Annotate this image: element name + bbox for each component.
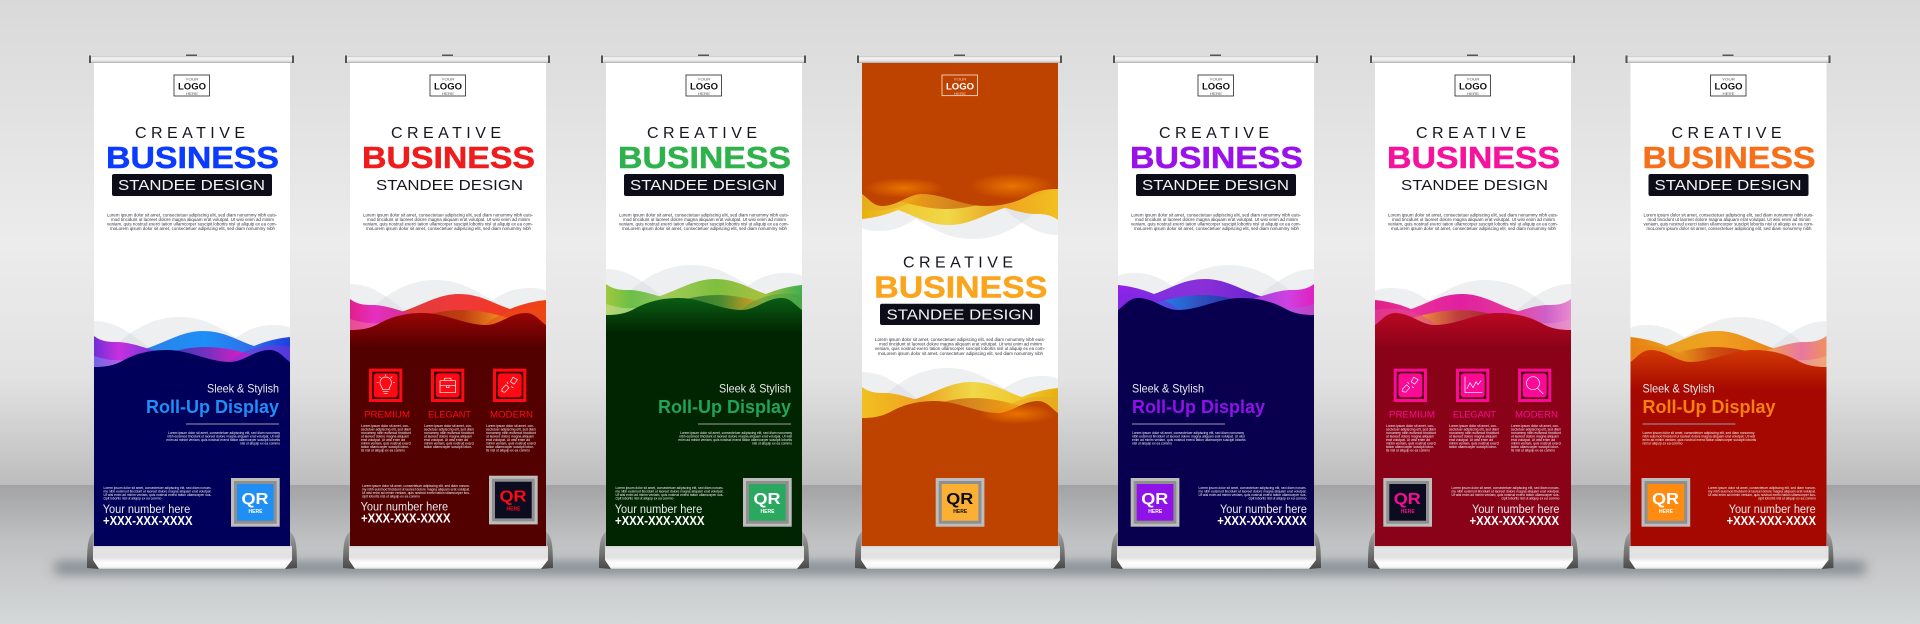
feature text: premium: Lorem ipsum dolor sit amet, con- (361, 424, 409, 428)
banner background (862, 60, 1058, 546)
feature labels (364, 410, 533, 421)
feature text: premium: tation ullamcorper suscipit lobor- (1386, 445, 1434, 449)
body text: mod tincidunt ut laoreet dolore magna aliquam erat volutpat. Ut wisi enim ad minim (879, 342, 1042, 346)
body text: moLorem ipsum dolor sit amet, consectetuer adipiscing elit, sed diam nonummy nibh (366, 226, 532, 231)
feature text: modern: minim veniam, quis nostrud exerci (486, 442, 536, 446)
feature text: elegant (424, 424, 474, 449)
logo: LOGO (1714, 82, 1742, 92)
logo: LOGO (690, 82, 718, 92)
contact text: Ut wisi enim ad minim veniam, quis nostrud exerci tation ullamcorper sus- (1708, 493, 1816, 497)
contact text: +XXX-XXX-XXXX (1217, 514, 1307, 528)
contact text: Ut wisi enim ad minim veniam, quis nostrud exerci tation ullamcorper sus- (1452, 493, 1560, 497)
body text: moLorem ipsum dolor sit amet, consectetuer adipiscing elit, sed diam nonummy nibh (878, 351, 1044, 356)
bottom wave graphic (862, 368, 1058, 546)
contact text (615, 486, 724, 528)
description: nisl ut aliquip ex ea commo (1642, 442, 1683, 446)
body text: moLorem ipsum dolor sit amet, consectetuer adipiscing elit, sed diam nonummy nibh (1391, 226, 1557, 231)
body text (363, 212, 534, 231)
top wave graphic (862, 60, 1058, 239)
feature text: elegant: erat volutpat. Ut wisi enim ad (424, 438, 468, 442)
title: business: BUSINESS (1642, 140, 1816, 175)
contact text: my nibh euismod tincidunt ut laoreet dolore magna aliquam erat volutpat. (1198, 490, 1307, 494)
divider (186, 424, 279, 425)
icon: briefcase (432, 370, 463, 400)
QR block (936, 478, 984, 527)
wave graphic (94, 317, 290, 546)
subtitle pill (1136, 174, 1296, 196)
logo: HERE (954, 92, 967, 96)
feature text: premium: minim veniam, quis nostrud exerci (1386, 442, 1436, 446)
contact text: Your number here (103, 504, 190, 516)
title: business: BUSINESS (1387, 140, 1560, 175)
body text: moLorem ipsum dolor sit amet, consectetuer adipiscing elit, sed diam nonummy nibh (110, 226, 276, 231)
contact text: cipit lobortis nisl ut aliquip ex ea commo (1502, 496, 1560, 500)
stand base (343, 532, 553, 569)
description: enim ad minim veniam, quis nostrud exerci tation ullamcorper suscipit lobortis (1642, 438, 1757, 442)
feature text: modern: minim veniam, quis nostrud exerci (1511, 442, 1561, 446)
feature text: premium: ut laoreet dolore magna aliquam (361, 434, 409, 438)
contact text: cipit lobortis nisl ut aliquip ex ea commo (616, 496, 674, 500)
logo: YOUR (1210, 78, 1223, 82)
body text: mod tincidunt ut laoreet dolore magna aliquam erat volutpat. Ut wisi enim ad minim (367, 217, 530, 222)
feature labels: PREMIUM (364, 410, 410, 421)
feature labels: ELEGANT (428, 410, 471, 421)
heading: roll-up display: Roll-Up Display (658, 396, 792, 417)
logo: YOUR (442, 78, 455, 82)
logo: HERE (186, 92, 199, 96)
feature text: premium: tis nisl ut aliquip ex ea commo (361, 448, 405, 452)
feature text: modern: tis nisl ut aliquip ex ea commo (486, 448, 530, 452)
description: Lorem ipsum dolor sit amet, consectetuer adipiscing elit, sed diam nonummy (1642, 431, 1755, 435)
divider (698, 424, 791, 425)
feature text: elegant: minim veniam, quis nostrud exerci (1449, 442, 1499, 446)
feature text: premium (1386, 424, 1436, 452)
icon: magnifier (1520, 370, 1550, 400)
divider (1642, 424, 1736, 425)
logo: HERE (1722, 92, 1735, 96)
banner background (94, 60, 290, 546)
feature text: modern: nonummy nibh euismod tincidunt (486, 431, 536, 435)
feature text: premium: erat volutpat. Ut wisi enim ad (1386, 438, 1430, 442)
contact text: my nibh euismod tincidunt ut laoreet dolore magna aliquam erat volutpat. (1452, 490, 1560, 494)
heading: roll-up display: Roll-Up Display (1132, 396, 1266, 417)
body text: Lorem ipsum dolor sit amet, consectetuer adipiscing elit, sed diam nonummy nibh euis- (875, 337, 1046, 342)
feature text: premium: ut laoreet dolore magna aliquam (1386, 434, 1434, 438)
contact text: Lorem ipsum dolor sit amet, consectetuer adipiscing elit, sed diam nonum- (362, 484, 470, 488)
QR block (743, 478, 792, 527)
feature text: modern (1511, 424, 1561, 452)
logo: LOGO (178, 82, 206, 92)
feature text: modern: ut laoreet dolore magna aliquam (486, 434, 534, 438)
feature labels: PREMIUM (1389, 410, 1435, 421)
subtitle pill (112, 174, 272, 196)
feature text: modern: tis nisl ut aliquip ex ea commo (1511, 448, 1555, 452)
contact text: Your number here (1472, 504, 1560, 516)
body text: mod tincidunt ut laoreet dolore magna aliquam erat volutpat. Ut wisi enim ad minim (1392, 217, 1555, 222)
QR block: HERE (1401, 509, 1415, 515)
description (1132, 431, 1246, 446)
contact text: my nibh euismod tincidunt ut laoreet dolore magna aliquam erat volutpat. (616, 490, 724, 494)
title: business: BUSINESS (618, 140, 791, 175)
background floor (0, 485, 1920, 624)
contact text: Lorem ipsum dolor sit amet, consectetuer adipiscing elit, sed diam nonum- (1198, 486, 1306, 490)
subtitle pill (1648, 174, 1808, 196)
orange glow: bottom (979, 404, 1055, 424)
body text: Lorem ipsum dolor sit amet, consectetuer adipiscing elit, sed diam nonummy nibh euis- (619, 212, 790, 218)
body text: mod tincidunt ut laoreet dolore magna aliquam erat volutpat. Ut wisi enim ad minim (1135, 217, 1298, 222)
body text (875, 337, 1046, 356)
feature text: premium: tis nisl ut aliquip ex ea commo (1386, 448, 1430, 452)
logo: LOGO (1459, 82, 1487, 92)
contact text: +XXX-XXX-XXXX (361, 512, 451, 526)
icon: light bulb (370, 370, 401, 400)
tagline: Sleek & Stylish (719, 382, 791, 396)
icon: broken chain (494, 370, 525, 400)
body text (619, 212, 790, 231)
contact text: +XXX-XXX-XXXX (1470, 514, 1560, 528)
description: nisl ut aliquip ex ea commo (752, 442, 792, 446)
logo (430, 75, 466, 96)
feature text: premium: erat volutpat. Ut wisi enim ad (361, 438, 405, 442)
title: creative: CREATIVE (135, 125, 245, 142)
body text: Lorem ipsum dolor sit amet, consectetuer adipiscing elit, sed diam nonummy nibh euis- (107, 212, 278, 218)
contact text: Your number here (615, 504, 702, 516)
contact text: Ut wisi enim ad minim veniam, quis nostrud exerci tation ullamcorper sus- (1198, 493, 1306, 497)
contact text: Ut wisi enim ad minim veniam, quis nostrud exerci tation ullamcorper sus- (616, 493, 724, 497)
feature text: premium: Lorem ipsum dolor sit amet, con- (1386, 424, 1434, 428)
feature text: modern: erat volutpat. Ut wisi enim ad (1511, 438, 1555, 442)
banner background (350, 60, 546, 546)
logo: YOUR (1466, 78, 1480, 82)
feature text: premium: nonummy nibh euismod tincidunt (361, 431, 411, 435)
feature text: elegant: sectetuer adipiscing elit, sed diam (1449, 428, 1499, 432)
QR block: HERE (1659, 509, 1674, 515)
description (166, 431, 280, 446)
contact text: Your number here (361, 502, 448, 514)
feature text: premium: tation ullamcorper suscipit lobor- (361, 445, 409, 449)
QR block: HERE (248, 509, 263, 515)
subtitle pill (880, 304, 1040, 325)
body text: moLorem ipsum dolor sit amet, consectetuer adipiscing elit, sed diam nonummy nibh (622, 226, 788, 231)
feature text: elegant: minim veniam, quis nostrud exerci (424, 442, 474, 446)
description: Lorem ipsum dolor sit amet, consectetuer adipiscing elit, sed diam nonummy (168, 431, 280, 435)
body text: veniam, quis nostrud exerci tation ullamcorper suscipit lobortis nisl ut aliquip ex ea com- (1644, 222, 1814, 226)
heading: roll-up display: Roll-Up Display (1642, 396, 1776, 417)
QR block (1131, 478, 1179, 527)
feature text: modern: Lorem ipsum dolor sit amet, con- (1511, 424, 1559, 428)
logo (174, 75, 210, 96)
top rod (1626, 54, 1830, 63)
subtitle pill: STANDEE DESIGN (886, 307, 1034, 324)
body text: mod tincidunt ut laoreet dolore magna aliquam erat volutpat. Ut wisi enim ad minim (623, 217, 786, 222)
heading: roll-up display: Roll-Up Display (146, 396, 280, 417)
feature text: modern: tation ullamcorper suscipit lobor- (1511, 445, 1559, 449)
body text: veniam, quis nostrud exerci tation ullamcorper suscipit lobortis nisl ut aliquip ex ea com- (619, 222, 790, 226)
body text: Lorem ipsum dolor sit amet, consectetuer adipiscing elit, sed diam nonummy nibh euis- (1131, 212, 1302, 218)
description: nisl ut aliquip ex ea commo (240, 442, 280, 446)
orange glow: top left (864, 178, 944, 198)
QR block: QR (1394, 491, 1421, 508)
contact text: my nibh euismod tincidunt ut laoreet dolore magna aliquam erat volutpat. (362, 488, 470, 492)
feature text: modern: erat volutpat. Ut wisi enim ad (486, 438, 530, 442)
contact text: +XXX-XXX-XXXX (615, 514, 705, 528)
contact text: Lorem ipsum dolor sit amet, consectetuer adipiscing elit, sed diam nonum- (1452, 486, 1560, 490)
description: Lorem ipsum dolor sit amet, consectetuer adipiscing elit, sed diam nonummy (680, 431, 792, 435)
feature text: elegant: tation ullamcorper suscipit lobor- (1449, 445, 1497, 449)
body text (1131, 212, 1302, 231)
feature text: elegant: tation ullamcorper suscipit lobor- (424, 445, 472, 449)
subtitle pill: STANDEE DESIGN (630, 177, 777, 194)
description (1642, 431, 1757, 446)
description: nibh euismod tincidunt ut laoreet dolore magna aliquam erat volutpat. Ut wisi (679, 434, 792, 438)
wave graphic (1375, 280, 1571, 546)
QR block: HERE (1148, 509, 1163, 515)
feature text: modern: tation ullamcorper suscipit lobor- (486, 445, 534, 449)
title: creative: CREATIVE (1159, 125, 1269, 142)
feature text: premium: nonummy nibh euismod tincidunt (1386, 431, 1436, 435)
feature labels: MODERN (1515, 410, 1558, 421)
subtitle: STANDEE DESIGN (376, 177, 523, 194)
title: creative: CREATIVE (647, 125, 757, 142)
stand base (1624, 532, 1834, 569)
top rod (1113, 54, 1318, 63)
feature text: elegant: ut laoreet dolore magna aliquam (1449, 434, 1497, 438)
feature text: elegant: ut laoreet dolore magna aliquam (424, 434, 472, 438)
icon: line chart (1458, 370, 1488, 400)
contact text: cipit lobortis nisl ut aliquip ex ea commo (1758, 496, 1816, 500)
QR block (489, 476, 538, 524)
logo: HERE (1210, 92, 1223, 96)
feature text: premium: sectetuer adipiscing elit, sed diam (1386, 428, 1436, 432)
contact text (1708, 486, 1817, 528)
QR block: QR (754, 491, 780, 508)
body text: Lorem ipsum dolor sit amet, consectetuer adipiscing elit, sed diam nonummy nibh euis- (363, 212, 534, 218)
wave graphic (606, 265, 802, 546)
description (678, 431, 792, 446)
feature text: modern: nonummy nibh euismod tincidunt (1511, 431, 1561, 435)
feature text: elegant: nonummy nibh euismod tincidunt (1449, 431, 1499, 435)
title: creative: CREATIVE (903, 254, 1013, 271)
title: business: BUSINESS (874, 270, 1047, 305)
contact text (103, 486, 212, 528)
body text: veniam, quis nostrud exerci tation ullamcorper suscipit lobortis nisl ut aliquip ex ea com- (1388, 222, 1559, 226)
description: nibh euismod tincidunt ut laoreet dolore magna aliquam erat volutpat. Ut wisi (1642, 434, 1755, 438)
logo: LOGO (434, 82, 462, 92)
stand base (87, 532, 297, 569)
logo: HERE (1467, 92, 1480, 96)
logo: HERE (442, 92, 455, 96)
feature text: premium (361, 424, 411, 452)
body text (107, 212, 278, 231)
title: business: BUSINESS (1130, 140, 1303, 175)
feature labels: MODERN (490, 410, 533, 421)
logo: YOUR (1722, 78, 1736, 82)
top rod (1370, 54, 1575, 63)
subtitle pill: STANDEE DESIGN (118, 177, 265, 194)
body text (1644, 212, 1814, 231)
feature text: premium: sectetuer adipiscing elit, sed diam (361, 428, 411, 432)
orange glow: top right (970, 173, 1054, 199)
body text: Lorem ipsum dolor sit amet, consectetuer adipiscing elit, sed diam nonummy nibh euis- (1388, 212, 1559, 218)
description: enim ad minim veniam, quis nostrud exerci tation ullamcorper suscipit lobortis (166, 438, 280, 442)
contact text: my nibh euismod tincidunt ut laoreet dolore magna aliquam erat volutpat. (1708, 490, 1816, 494)
body text: veniam, quis nostrud exerci tation ullamcorper suscipit lobortis nisl ut aliquip ex ea com- (107, 222, 278, 226)
QR block: QR (1141, 491, 1168, 508)
contact text: Lorem ipsum dolor sit amet, consectetuer adipiscing elit, sed diam nonum- (616, 486, 724, 490)
title: creative: CREATIVE (1416, 125, 1526, 142)
logo: YOUR (698, 78, 711, 82)
wave graphic (1630, 317, 1826, 546)
feature text: elegant: Lorem ipsum dolor sit amet, con- (424, 424, 472, 428)
logo: YOUR (186, 78, 199, 82)
panel: purple standee (1111, 54, 1321, 569)
stand base (599, 532, 809, 569)
QR block (1642, 478, 1690, 527)
wave graphic (1118, 265, 1314, 546)
contact text (1198, 486, 1307, 528)
logo (1710, 75, 1746, 96)
contact text (361, 484, 470, 526)
feature text: modern (486, 424, 536, 452)
contact text: Lorem ipsum dolor sit amet, consectetuer adipiscing elit, sed diam nonum- (104, 486, 212, 490)
logo (686, 75, 722, 96)
feature labels: ELEGANT (1453, 410, 1496, 421)
tagline: Sleek & Stylish (207, 382, 279, 396)
title: creative: CREATIVE (1672, 125, 1782, 142)
QR block: QR (946, 491, 973, 508)
top rod (345, 54, 550, 63)
logo: YOUR (954, 78, 967, 82)
contact text: Ut wisi enim ad minim veniam, quis nostrud exerci tation ullamcorper sus- (104, 493, 212, 497)
contact text: my nibh euismod tincidunt ut laoreet dolore magna aliquam erat volutpat. (104, 490, 212, 494)
feature text: elegant: nonummy nibh euismod tincidunt (424, 431, 474, 435)
title: creative: CREATIVE (391, 125, 501, 142)
logo: LOGO (946, 82, 974, 92)
panel: green standee (599, 54, 809, 569)
contact text (1452, 486, 1560, 528)
body text: moLorem ipsum dolor sit amet, consectetuer adipiscing elit, sed diam nonummy nibh (1646, 226, 1812, 231)
background wall (0, 0, 1920, 485)
panel: pink standee (1368, 54, 1578, 569)
QR block: QR (1652, 491, 1679, 508)
feature text: premium: minim veniam, quis nostrud exerci (361, 442, 411, 446)
QR block (1383, 478, 1432, 527)
top rod (601, 54, 806, 63)
panel: red standee (343, 54, 553, 569)
banner background (1630, 60, 1826, 546)
logo: HERE (698, 92, 711, 96)
feature text: modern: sectetuer adipiscing elit, sed diam (486, 428, 536, 432)
contact text: Your number here (1729, 504, 1816, 516)
body text: mod tincidunt ut laoreet dolore magna aliquam erat volutpat. Ut wisi enim ad minim (111, 217, 274, 222)
QR block: HERE (760, 509, 775, 515)
contact text: Lorem ipsum dolor sit amet, consectetuer adipiscing elit, sed diam nonum- (1708, 486, 1816, 490)
contact text: cipit lobortis nisl ut aliquip ex ea commo (362, 494, 420, 498)
QR block (231, 478, 280, 527)
description: nibh euismod tincidunt ut laoreet dolore magna aliquam erat volutpat. Ut wisi (167, 434, 280, 438)
logo (1198, 75, 1234, 96)
feature text: elegant: sectetuer adipiscing elit, sed diam (424, 428, 474, 432)
tagline: Sleek & Stylish (1642, 382, 1714, 396)
panel: orange centre standee (855, 54, 1065, 569)
body text: veniam, quis nostrud exerci tation ullamcorper suscipit lobortis nisl ut aliquip ex ea com- (1131, 222, 1302, 226)
body text: mod tincidunt ut laoreet dolore magna aliquam erat volutpat. Ut wisi enim ad minim (1648, 217, 1811, 222)
contact text: +XXX-XXX-XXXX (1726, 514, 1817, 528)
description: nisl ut aliquip ex ea commo (1132, 442, 1172, 446)
description: nibh euismod tincidunt ut laoreet dolore magna aliquam erat volutpat. Ut wisi (1132, 434, 1245, 438)
feature text: elegant: erat volutpat. Ut wisi enim ad (1449, 438, 1493, 442)
QR block: QR (242, 491, 268, 508)
floor shadow (55, 563, 1865, 573)
title: business: BUSINESS (362, 140, 535, 175)
body text: moLorem ipsum dolor sit amet, consectetuer adipiscing elit, sed diam nonummy nibh (1134, 226, 1300, 231)
wave graphic (350, 280, 546, 546)
body text: Lorem ipsum dolor sit amet, consectetuer adipiscing elit, sed diam nonummy nibh euis- (1644, 212, 1814, 218)
divider (1132, 424, 1225, 425)
top rod (857, 54, 1062, 63)
icon: broken chain (1395, 370, 1426, 400)
panel: blue standee (87, 54, 297, 569)
banner background (1118, 60, 1314, 546)
QR block: QR (500, 489, 526, 506)
subtitle pill: STANDEE DESIGN (1654, 177, 1802, 194)
body text (1388, 212, 1559, 231)
description: enim ad minim veniam, quis nostrud exerci tation ullamcorper suscipit lobortis (1132, 438, 1246, 442)
contact text: cipit lobortis nisl ut aliquip ex ea commo (104, 496, 162, 500)
banner background (606, 60, 802, 546)
panel: orange-red standee (1624, 54, 1834, 569)
stand base (855, 532, 1065, 569)
body text: veniam, quis nostrud exerci tation ullamcorper suscipit lobortis nisl ut aliquip ex ea com- (363, 222, 534, 226)
logo (942, 75, 978, 96)
feature text: modern: Lorem ipsum dolor sit amet, con- (486, 424, 534, 428)
stand base (1111, 532, 1321, 569)
contact text: Ut wisi enim ad minim veniam, quis nostrud exerci tation ullamcorper sus- (362, 491, 470, 495)
feature text: elegant (1449, 424, 1499, 449)
feature text: modern: sectetuer adipiscing elit, sed diam (1511, 428, 1561, 432)
logo: LOGO (1202, 82, 1230, 92)
body text: veniam, quis nostrud exerci tation ullamcorper suscipit lobortis nisl ut aliquip ex ea com- (875, 346, 1046, 351)
logo (1455, 75, 1490, 96)
banner background (1375, 60, 1571, 546)
feature text: elegant: Lorem ipsum dolor sit amet, con- (1449, 424, 1497, 428)
contact text: Your number here (1220, 504, 1307, 516)
description: enim ad minim veniam, quis nostrud exerci tation ullamcorper suscipit lobortis (678, 438, 792, 442)
subtitle pill (624, 174, 784, 196)
description: Lorem ipsum dolor sit amet, consectetuer adipiscing elit, sed diam nonummy (1132, 431, 1244, 435)
subtitle pill: STANDEE DESIGN (1142, 177, 1289, 194)
tagline: Sleek & Stylish (1132, 382, 1204, 396)
contact text: +XXX-XXX-XXXX (103, 514, 193, 528)
stand base (1368, 532, 1578, 569)
subtitle: STANDEE DESIGN (1401, 177, 1548, 194)
top rod (89, 54, 294, 63)
feature text: modern: ut laoreet dolore magna aliquam (1511, 434, 1559, 438)
title: business: BUSINESS (106, 140, 279, 175)
QR block: HERE (506, 507, 521, 513)
feature labels (1389, 410, 1558, 421)
contact text: cipit lobortis nisl ut aliquip ex ea commo (1248, 496, 1307, 500)
QR block: HERE (953, 509, 968, 515)
